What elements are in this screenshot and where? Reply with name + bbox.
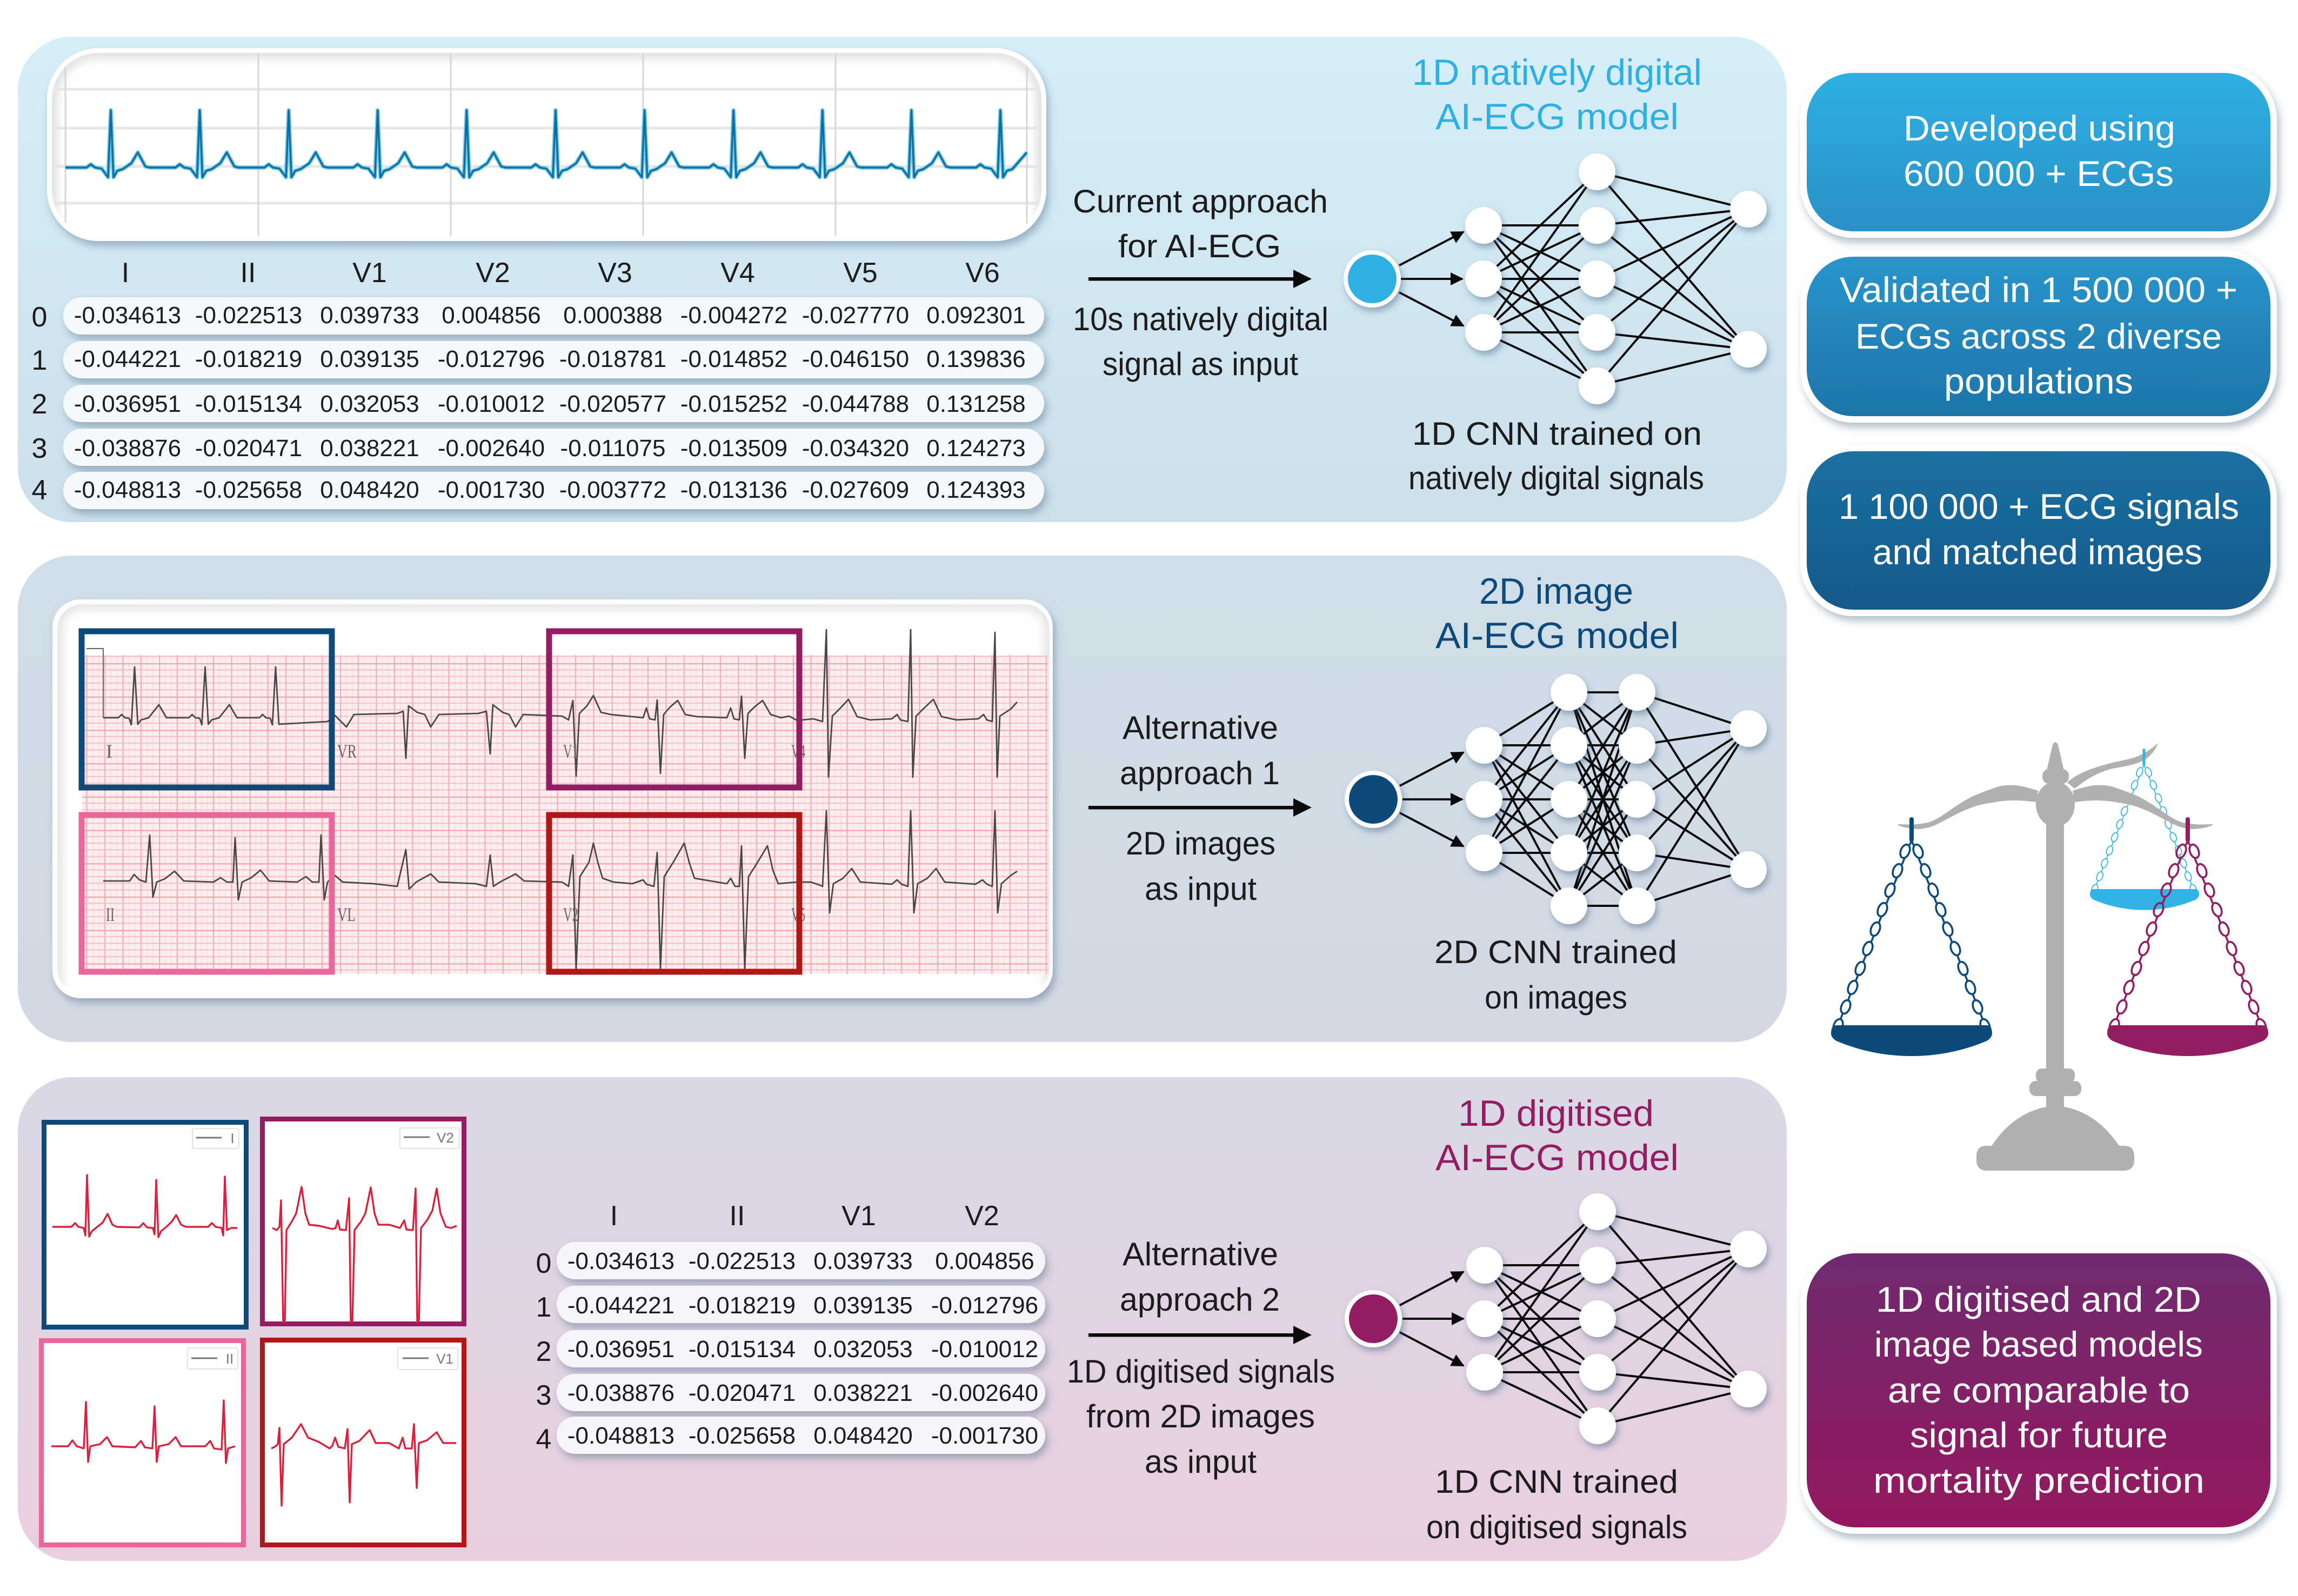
callout: conclusion: signal for future xyxy=(1910,1415,2168,1455)
neural network: 1D CNN on digitised signals xyxy=(1345,1193,1767,1444)
caption: 1D CNN trained on natively digital signals: natively digital signals xyxy=(1408,460,1704,496)
signal table: 8 leads, 5 rows: 0.039135 xyxy=(320,346,419,372)
signal table: 4 leads, 5 rows: V1 xyxy=(841,1200,876,1232)
signal table: 4 leads, 5 rows: 0.004856 xyxy=(935,1248,1034,1274)
signal table: 8 leads, 5 rows: 0.124393 xyxy=(926,477,1026,503)
callout: validation dataset xyxy=(1803,253,2274,419)
ECG traces: bottom row xyxy=(103,811,1017,970)
callout: conclusion: are comparable to xyxy=(1888,1370,2190,1410)
signal table: 4 leads, 5 rows: -0.001730 xyxy=(931,1423,1038,1449)
signal table: 8 leads, 5 rows: -0.013509 xyxy=(680,435,787,462)
signal table: 8 leads, 5 rows: V5 xyxy=(843,257,878,289)
signal table: 4 leads, 5 rows: 0.039733 xyxy=(813,1248,913,1274)
signal table: 8 leads, 5 rows: 0.039733 xyxy=(320,302,419,329)
lead labels: I xyxy=(106,740,112,762)
model title: 1D natively digital: AI-ECG model xyxy=(1435,96,1679,137)
callout: development dataset: Developed using xyxy=(1903,108,2175,148)
signal table: 8 leads, 5 rows: 0 xyxy=(32,302,47,333)
signal table: 8 leads, 5 rows: -0.015134 xyxy=(195,391,302,417)
signal table: 8 leads, 5 rows: 0.000388 xyxy=(563,302,663,329)
signal table: 8 leads, 5 rows: V1 xyxy=(352,257,387,289)
signal table: 8 leads, 5 rows: 0.032053 xyxy=(320,391,419,417)
scale: dark blue pan and chains xyxy=(1831,817,1992,1056)
signal table: 8 leads, 5 rows: 0.139836 xyxy=(926,346,1026,372)
signal table: 4 leads, 5 rows: -0.018219 xyxy=(689,1292,796,1319)
signal table: 8 leads, 5 rows: -0.044221 xyxy=(74,346,181,372)
signal table: 8 leads, 5 rows: -0.001730 xyxy=(438,477,545,503)
signal table: 4 leads, 5 rows: 1 xyxy=(536,1292,551,1323)
callout: development dataset xyxy=(1803,70,2274,235)
signal table: 8 leads, 5 rows xyxy=(32,257,1044,509)
signal table: 8 leads, 5 rows: 1 xyxy=(32,345,47,376)
signal table: 8 leads, 5 rows: -0.025658 xyxy=(195,477,302,503)
scale: grey stand and balanced beam xyxy=(1898,742,2213,1171)
ECG traces: top row xyxy=(103,630,1017,777)
signal table: 4 leads, 5 rows: -0.036951 xyxy=(567,1336,674,1363)
callout: conclusion xyxy=(1803,1250,2274,1531)
signal table: 4 leads, 5 rows: -0.015134 xyxy=(689,1336,796,1363)
caption: 1D CNN trained on digitised signals: on digitised signals xyxy=(1426,1509,1687,1545)
signal table: 8 leads, 5 rows: V4 xyxy=(720,257,755,289)
plot: lead V1 xyxy=(263,1340,464,1545)
callout: development dataset: 600 000 + ECGs xyxy=(1903,153,2174,193)
signal table: 4 leads, 5 rows: -0.002640 xyxy=(931,1380,1038,1406)
input label: 2D images: as input xyxy=(1145,871,1257,907)
signal table: 4 leads, 5 rows: 2 xyxy=(536,1336,551,1367)
signal table: 8 leads, 5 rows: -0.004272 xyxy=(680,302,787,329)
approach label: alternative approach 2: Alternative xyxy=(1123,1236,1278,1272)
signal table: 4 leads, 5 rows: -0.020471 xyxy=(689,1380,796,1406)
signal table: 4 leads, 5 rows: 4 xyxy=(536,1424,551,1455)
signal table: 4 leads, 5 rows: 0.048420 xyxy=(813,1423,913,1449)
signal table: 8 leads, 5 rows: -0.018219 xyxy=(195,346,302,372)
signal table: 8 leads, 5 rows: -0.034613 xyxy=(74,302,181,329)
input label: 1D digitised signals from 2D images: 1D digitised signals xyxy=(1067,1353,1335,1390)
signal table: 8 leads, 5 rows: -0.015252 xyxy=(680,391,787,417)
signal table: 8 leads, 5 rows: -0.003772 xyxy=(559,477,666,503)
signal table: 8 leads, 5 rows: -0.012796 xyxy=(438,346,545,372)
plot: lead II xyxy=(41,1340,243,1545)
model title: 1D digitised: 1D digitised xyxy=(1458,1093,1654,1134)
signal table: 8 leads, 5 rows: -0.046150 xyxy=(802,346,909,372)
caption: 1D CNN trained on digitised signals: 1D CNN trained xyxy=(1435,1464,1678,1500)
arrow xyxy=(1088,270,1312,288)
approach label: current approach: for AI-ECG xyxy=(1118,228,1281,264)
plot: lead I: I xyxy=(230,1130,235,1146)
signal table: 4 leads, 5 rows: 0.032053 xyxy=(813,1336,913,1363)
lead labels: V5 xyxy=(791,904,805,925)
crop boxes: lead I, V2, II, V1 xyxy=(82,631,799,972)
arrow xyxy=(1088,1326,1312,1344)
approach label: alternative approach 1: approach 1 xyxy=(1120,755,1280,791)
lead labels: V2 xyxy=(563,904,578,925)
input label: 2D images xyxy=(1126,825,1275,907)
signal table: 4 leads, 5 rows: -0.034613 xyxy=(567,1248,674,1274)
input label: 1D digitised signals from 2D images: as input xyxy=(1145,1444,1257,1480)
plot: lead V2: V2 xyxy=(437,1130,454,1146)
scale: light blue pan and chains xyxy=(2090,749,2199,910)
model title: 1D natively digital: 1D natively digital xyxy=(1412,52,1702,93)
signal table: 4 leads, 5 rows: I xyxy=(610,1200,618,1232)
12-lead ECG paper image card xyxy=(52,599,1053,1031)
callout: validation dataset: Validated in 1 500 000 + xyxy=(1840,270,2237,310)
lead labels xyxy=(106,740,805,925)
model title: 2D image: 2D image xyxy=(1479,571,1633,612)
approach label: current approach xyxy=(1073,183,1328,264)
signal table: 4 leads, 5 rows: 3 xyxy=(536,1380,551,1411)
panel: 1D natively digital AI-ECG model xyxy=(18,37,1787,522)
signal table: 4 leads, 5 rows: -0.025658 xyxy=(689,1423,796,1449)
signal table: 8 leads, 5 rows: -0.027609 xyxy=(802,477,909,503)
signal table: 8 leads, 5 rows: 0.092301 xyxy=(926,302,1026,329)
ECG trace: blue xyxy=(65,110,1027,177)
signal table: 4 leads, 5 rows: -0.038876 xyxy=(567,1380,674,1406)
approach label: alternative approach 1 xyxy=(1120,710,1280,791)
caption: 1D CNN trained on natively digital signals: 1D CNN trained on xyxy=(1412,416,1702,452)
model title: 1D digitised: AI-ECG model xyxy=(1435,1137,1679,1178)
callout: signals and images xyxy=(1803,448,2274,613)
input label: 10s natively digital signal: signal as input xyxy=(1103,346,1298,382)
arrow xyxy=(1088,798,1312,817)
signal table: 8 leads, 5 rows: -0.044788 xyxy=(802,391,909,417)
signal table: 8 leads, 5 rows: -0.022513 xyxy=(195,302,302,329)
signal table: 8 leads, 5 rows: 4 xyxy=(32,475,47,506)
signal table: 8 leads, 5 rows: 0.131258 xyxy=(926,391,1026,417)
caption: 2D CNN trained on images: on images xyxy=(1485,979,1627,1016)
signal table: 8 leads, 5 rows: -0.011075 xyxy=(560,435,665,462)
digitised lead plots xyxy=(41,1119,464,1545)
signal table: 4 leads, 5 rows: -0.048813 xyxy=(567,1423,674,1449)
panel: 1D digitised AI-ECG model xyxy=(18,1077,1787,1561)
input label: 10s natively digital signal: 10s natively digital xyxy=(1073,301,1328,337)
signal table: 8 leads, 5 rows: -0.038876 xyxy=(74,435,181,462)
caption: 1D CNN trained on natively digital signals xyxy=(1408,416,1704,496)
signal table: 4 leads, 5 rows: 0 xyxy=(536,1248,551,1279)
signal table: 8 leads, 5 rows: V6 xyxy=(965,257,1000,289)
signal table: 4 leads, 5 rows: 0.038221 xyxy=(813,1380,913,1406)
signal table: 4 leads, 5 rows: -0.010012 xyxy=(931,1336,1038,1363)
approach label: alternative approach 2: approach 2 xyxy=(1120,1281,1280,1318)
panel: 2D image AI-ECG model xyxy=(18,556,1787,1042)
lead labels: V1 xyxy=(563,740,578,762)
digital ECG signal image card xyxy=(45,48,1054,251)
signal table: 4 leads, 5 rows: 0.039135 xyxy=(813,1292,913,1319)
approach label: alternative approach 2 xyxy=(1120,1236,1280,1318)
scale: purple pan and chains xyxy=(2107,817,2268,1056)
signal table: 4 leads, 5 rows: -0.044221 xyxy=(567,1292,674,1319)
signal table: 8 leads, 5 rows: II xyxy=(241,257,256,289)
signal table: 8 leads, 5 rows: 0.048420 xyxy=(320,477,419,503)
signal table: 8 leads, 5 rows: 2 xyxy=(32,389,47,420)
callout: signals and images: 1 100 000 + ECG signals xyxy=(1839,486,2239,526)
input label: 1D digitised signals from 2D images xyxy=(1067,1353,1335,1480)
signal table: 8 leads, 5 rows: V2 xyxy=(476,257,510,289)
signal table: 8 leads, 5 rows: 3 xyxy=(32,433,47,464)
plot: lead V1: V1 xyxy=(436,1351,453,1367)
signal table: 8 leads, 5 rows: -0.020577 xyxy=(559,391,666,417)
approach label: current approach: Current approach xyxy=(1073,183,1328,219)
signal table: 8 leads, 5 rows: -0.020471 xyxy=(195,435,302,462)
signal table: 8 leads, 5 rows: -0.027770 xyxy=(802,302,909,329)
signal table: 8 leads, 5 rows: -0.014852 xyxy=(680,346,787,372)
plot: lead I xyxy=(44,1122,246,1327)
icon: balance scale xyxy=(1831,742,2268,1171)
signal table: 8 leads, 5 rows: 0.004856 xyxy=(442,302,541,329)
callout: signals and images: and matched images xyxy=(1873,532,2202,572)
callout: validation dataset: ECGs across 2 diverse xyxy=(1855,316,2222,356)
model title: 2D image xyxy=(1435,571,1679,656)
signal table: 8 leads, 5 rows: 0.124273 xyxy=(926,435,1026,462)
model title: 1D digitised xyxy=(1435,1093,1679,1178)
signal table: 8 leads, 5 rows: 0.038221 xyxy=(320,435,419,462)
input label: 10s natively digital signal xyxy=(1073,301,1328,382)
signal table: 8 leads, 5 rows: -0.013136 xyxy=(680,477,787,503)
signal table: 8 leads, 5 rows: -0.048813 xyxy=(74,477,181,503)
signal table: 4 leads, 5 rows: V2 xyxy=(965,1200,999,1232)
plot: lead V2 xyxy=(263,1119,464,1324)
plot: lead II: II xyxy=(226,1351,233,1367)
signal table: 8 leads, 5 rows: I xyxy=(122,257,129,289)
signal table: 8 leads, 5 rows: -0.034320 xyxy=(802,435,909,462)
input label: 1D digitised signals from 2D images: from 2D images xyxy=(1086,1398,1315,1434)
signal table: 8 leads, 5 rows: V3 xyxy=(598,257,632,289)
callout: conclusion: image based models xyxy=(1874,1324,2203,1364)
caption: 2D CNN trained on images: 2D CNN trained xyxy=(1434,934,1677,970)
signal table: 8 leads, 5 rows: -0.036951 xyxy=(74,391,181,417)
callout: validation dataset: populations xyxy=(1944,361,2133,401)
caption: 1D CNN trained on digitised signals xyxy=(1426,1464,1687,1545)
signal table: 4 leads, 5 rows: -0.022513 xyxy=(689,1248,796,1274)
signal table: 4 leads, 5 rows: -0.012796 xyxy=(931,1292,1038,1319)
neural network: 2D CNN xyxy=(1345,674,1767,924)
lead labels: V4 xyxy=(791,740,805,762)
model title: 2D image: AI-ECG model xyxy=(1435,615,1679,656)
signal table: 8 leads, 5 rows: -0.010012 xyxy=(438,391,545,417)
caption: 2D CNN trained on images xyxy=(1434,934,1677,1016)
neural network: 1D CNN xyxy=(1344,153,1767,404)
lead labels: VL xyxy=(337,904,356,925)
scale: raised faded beam xyxy=(2067,743,2158,789)
callout: conclusion: mortality prediction xyxy=(1873,1460,2205,1500)
signal table: 8 leads, 5 rows: -0.018781 xyxy=(559,346,666,372)
lead labels: VR xyxy=(337,740,357,762)
signal table: 8 leads, 5 rows: -0.002640 xyxy=(438,435,545,462)
model title: 1D natively digital xyxy=(1412,52,1702,137)
callout: conclusion: 1D digitised and 2D xyxy=(1876,1279,2201,1319)
signal table: 4 leads, 5 rows xyxy=(536,1200,1045,1455)
approach label: alternative approach 1: Alternative xyxy=(1123,710,1278,746)
signal table: 4 leads, 5 rows: II xyxy=(730,1200,745,1232)
lead labels: II xyxy=(106,904,115,925)
input label: 2D images: 2D images xyxy=(1126,825,1275,862)
